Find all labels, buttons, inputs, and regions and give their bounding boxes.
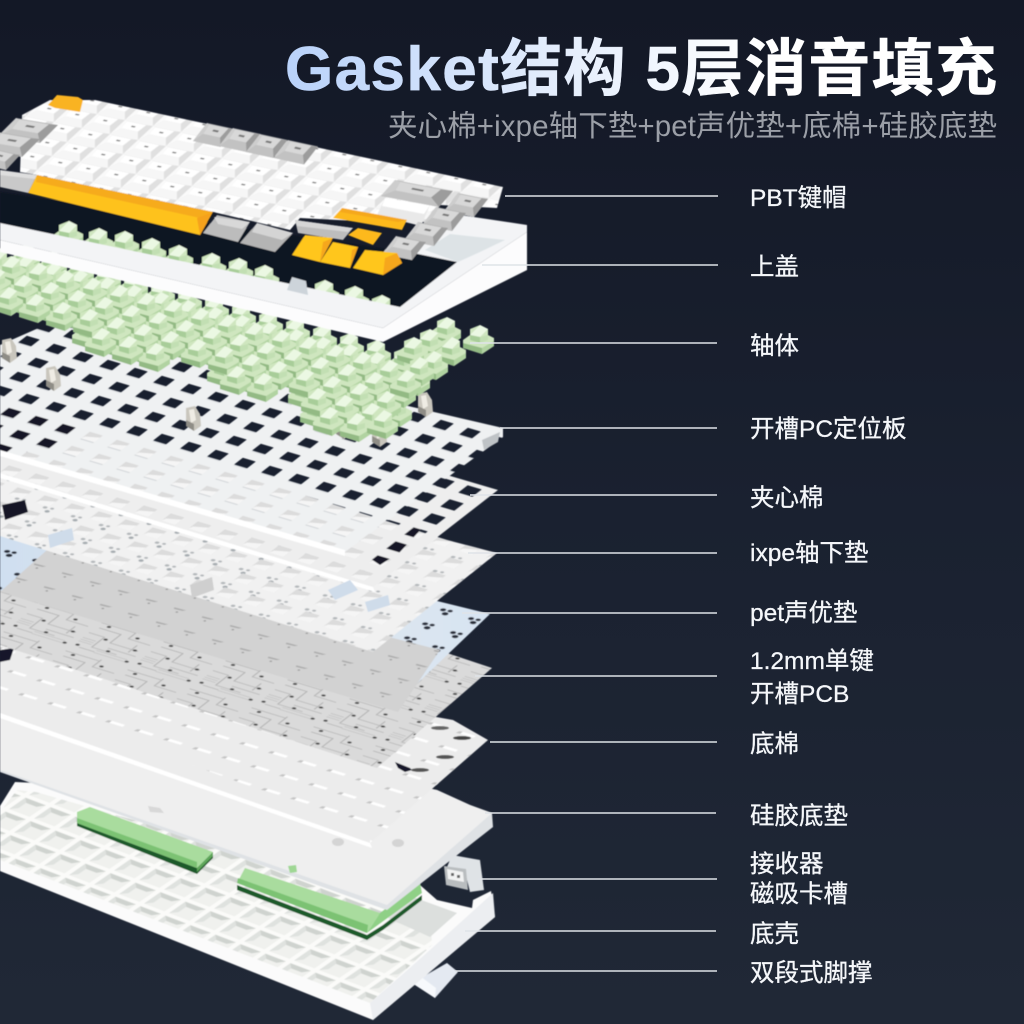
pet sound pad	[0, 525, 490, 712]
grey right keys	[381, 180, 488, 260]
title: Gasket结构 5层消音填充	[285, 35, 997, 104]
pet translucent grey sheet	[0, 550, 440, 712]
receiver compartment block	[388, 897, 457, 937]
label: top case: 上盖	[750, 253, 799, 281]
label: receiver slot	[478, 850, 848, 908]
white keys	[20, 100, 503, 230]
case inner rib grid	[0, 790, 432, 1003]
slotted PC plate	[0, 323, 503, 556]
label: sandwich foam: 夹心棉	[750, 484, 824, 512]
label: slotted PC plate: 开槽PC定位板	[750, 415, 907, 443]
silicone bottom pad	[0, 700, 493, 910]
ixpe switch pad	[0, 400, 497, 652]
label: ixpe pad: ixpe轴下垫	[750, 539, 868, 567]
grey modifier keys	[203, 215, 353, 252]
label: foot stand: 双段式脚撑	[750, 959, 872, 987]
foot stand	[412, 963, 458, 998]
grey function keys	[193, 123, 318, 164]
exploded keyboard illustration	[0, 95, 527, 1020]
label: bottom foam: 底棉	[750, 730, 799, 758]
label: receiver slot: 磁吸卡槽	[750, 880, 848, 908]
subtitle: 夹心棉+ixpe轴下垫+pet声优垫+底棉+硅胶底垫	[388, 110, 997, 143]
green silicone pad left	[77, 807, 213, 874]
yellow arrow keys	[292, 208, 407, 275]
bottom foam	[0, 640, 488, 848]
label: PCB: 1.2mm单键	[750, 647, 874, 675]
label: PCB	[475, 647, 874, 708]
plate stabilizers	[2, 338, 433, 447]
yellow Esc key	[48, 95, 83, 112]
white enter key	[377, 198, 430, 226]
PBT keycaps	[0, 95, 503, 275]
label: receiver slot: 接收器	[750, 850, 824, 878]
label: pet pad: pet声优垫	[750, 599, 858, 627]
label: silicone pad: 硅胶底垫	[750, 802, 848, 830]
bottom case	[0, 782, 495, 1020]
switches	[0, 244, 494, 442]
switches visible through frame opening	[52, 221, 396, 324]
PCB	[0, 590, 492, 768]
receiver magnetic slot	[444, 855, 484, 892]
label: bottom case: 底壳	[750, 920, 799, 948]
top case frame	[0, 192, 527, 342]
sandwich foam	[0, 368, 498, 587]
grey left keys	[0, 118, 58, 193]
green silicone pad right	[237, 868, 422, 940]
label: switches: 轴体	[750, 332, 799, 360]
label: PBT keycaps: PBT键帽	[750, 184, 847, 212]
label: PCB: 开槽PCB	[750, 680, 849, 708]
yellow spacebar	[28, 175, 213, 235]
